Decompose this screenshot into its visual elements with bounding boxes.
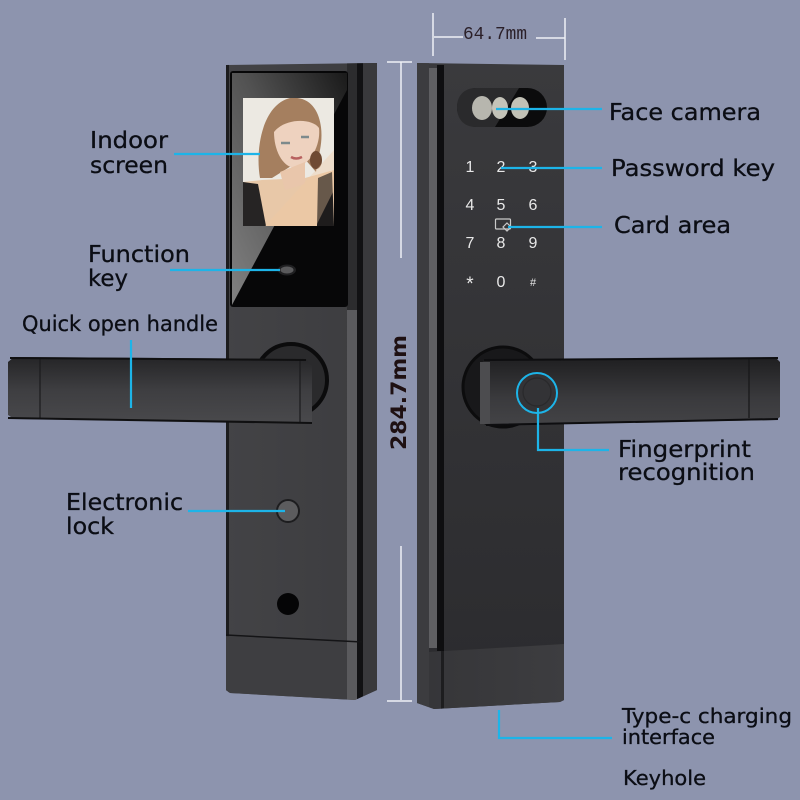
dimension: width 64.7mm: 64.7mm — [463, 25, 527, 45]
keypad: 0 — [497, 274, 506, 291]
keypad: 2 — [497, 159, 506, 176]
dimension: height 284.7mm: 284.7mm — [387, 335, 411, 450]
keypad: 8 — [497, 235, 506, 252]
keypad: 3 — [529, 159, 538, 176]
label: keyhole: Keyhole — [623, 766, 706, 790]
left lock: indoor unit — [8, 60, 378, 705]
label: electronic lock: lock — [66, 514, 115, 540]
label: indoor screen — [90, 128, 260, 179]
fingerprint sensor — [517, 373, 557, 413]
label: password key: Password key — [611, 156, 775, 182]
label: face camera: Face camera — [609, 100, 761, 126]
label: quick open handle: Quick open handle — [22, 312, 218, 336]
keypad: 6 — [529, 197, 538, 214]
screen glass — [230, 71, 348, 307]
rose — [255, 344, 327, 416]
keypad — [466, 159, 538, 295]
keypad: # — [530, 277, 537, 289]
screen glare — [232, 73, 347, 305]
label: fingerprint recognition — [538, 408, 755, 486]
dimension: width 64.7mm — [433, 13, 565, 60]
keypad: 1 — [466, 159, 475, 176]
label: type-c charging interface: Type-c charging — [621, 704, 792, 728]
label: function key: key — [88, 266, 128, 292]
handle — [480, 358, 780, 425]
keypad: 7 — [466, 235, 475, 252]
keyhole — [277, 593, 299, 615]
label: type-c charging interface — [499, 704, 792, 749]
label: electronic lock — [66, 490, 285, 540]
rose — [463, 347, 543, 427]
lock body — [226, 60, 378, 705]
keypad: 9 — [529, 235, 538, 252]
lock body — [417, 60, 565, 711]
function key — [278, 264, 296, 276]
camera window — [457, 88, 547, 127]
label: fingerprint recognition: recognition — [618, 460, 755, 486]
screen photo — [243, 98, 334, 226]
electronic lock button — [277, 500, 299, 522]
label: indoor screen: screen — [90, 153, 168, 179]
keypad: 5 — [497, 197, 506, 214]
label: indoor screen: Indoor — [90, 128, 169, 154]
label: fingerprint recognition: Fingerprint — [618, 437, 751, 463]
keypad: * — [466, 274, 474, 295]
label: card area: Card area — [614, 213, 731, 239]
card icon — [496, 219, 511, 231]
keypad: 4 — [466, 197, 475, 214]
right lock: outdoor unit — [417, 60, 780, 711]
label: electronic lock: Electronic — [66, 490, 183, 516]
dimension: height 284.7mm — [387, 62, 412, 701]
label: type-c charging interface: interface — [622, 725, 715, 749]
label: function key — [88, 242, 280, 292]
handle — [8, 357, 312, 423]
label: function key: Function — [88, 242, 190, 268]
